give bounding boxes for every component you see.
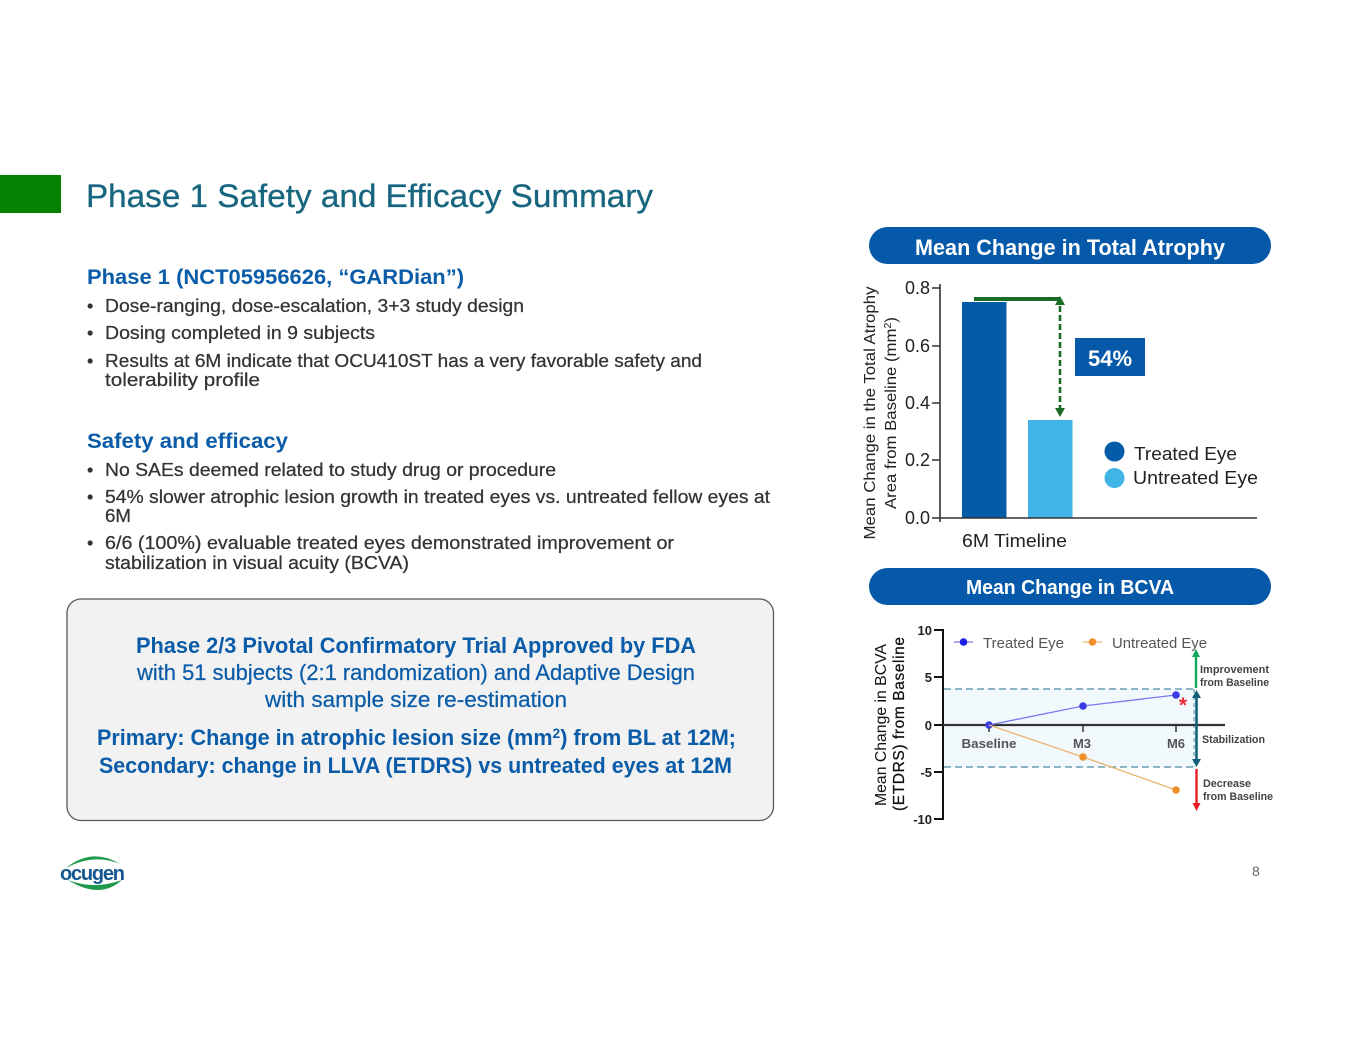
- text block: Safety and efficacy: [87, 430, 770, 573]
- text block: Safety and efficacy: 6M: [105, 505, 131, 526]
- y axis tick labels: 0.8: [905, 278, 930, 298]
- text block: Safety and efficacy: •: [87, 460, 93, 480]
- y axis tick labels: 0: [925, 718, 932, 733]
- bar: treated eye: [962, 302, 1006, 518]
- callout: Phase 2/3 trial: Primary: Change in atrophic lesion size (mm: [97, 725, 562, 750]
- text block: Safety and efficacy: No SAEs deemed related to study drug or procedure: [105, 459, 556, 480]
- text block: Safety and efficacy: 54% slower atrophic lesion growth in treated eyes vs. untreated fellow eyes at: [105, 486, 770, 507]
- text block: Phase 1 study: [87, 266, 702, 390]
- text block: Phase 1 study: •: [87, 296, 93, 316]
- callout: Phase 2/3 trial: Secondary: change in LLVA (ETDRS) vs untreated eyes at 12M: [99, 753, 732, 778]
- y axis title: 2: [883, 322, 894, 329]
- logo: ocugen: ocugen: [60, 863, 125, 885]
- y axis tick labels: 0.2: [905, 450, 930, 470]
- legend: Untreated Eye: [1112, 635, 1207, 652]
- title: Phase 1 Safety and Efficacy Summary: [86, 178, 653, 214]
- page number: 8: [1252, 863, 1260, 879]
- annotation labels: Stabilization: [1202, 734, 1265, 746]
- text block: Phase 1 study: Results at 6M indicate that OCU410ST has a very favorable safety and: [105, 350, 702, 371]
- annotation labels: [1200, 664, 1273, 803]
- title accent block: [0, 175, 61, 213]
- x axis labels: [962, 736, 1185, 751]
- axes: [932, 284, 1257, 522]
- text block: Safety and efficacy: stabilization in visual acuity (BCVA): [105, 552, 409, 573]
- y axis title: Area from Baseline (mm: [883, 342, 900, 509]
- legend: [954, 635, 1207, 652]
- callout: Phase 2/3 trial: Phase 2/3 Pivotal Confirmatory Trial Approved by FDA: [136, 633, 696, 658]
- annotation labels: from Baseline: [1200, 677, 1269, 689]
- series: untreated eye: [989, 725, 1180, 794]
- callout: 54%: 54%: [1088, 346, 1132, 371]
- annotation labels: Improvement: [1200, 664, 1269, 676]
- text block: Phase 1 study: Dosing completed in 9 subjects: [105, 322, 375, 343]
- series: treated eye: [985, 691, 1180, 729]
- callout: Phase 2/3 trial: with sample size re-estimation: [264, 687, 567, 712]
- callout: Phase 2/3 trial: 2: [553, 725, 560, 741]
- y axis tick labels: [913, 623, 932, 827]
- x axis labels: Baseline: [962, 736, 1016, 751]
- y axis title: Mean Change in the Total Atrophy: [862, 286, 879, 540]
- arrow: stabilization: [1192, 690, 1201, 767]
- y axis title: (ETDRS) from Baseline: [891, 637, 908, 811]
- y axis tick labels: 0.6: [905, 336, 930, 356]
- arrow: improvement: [1192, 649, 1200, 688]
- callout: Phase 2/3 trial: ) from BL at 12M;: [560, 725, 736, 750]
- text block: Phase 1 study: tolerability profile: [105, 369, 260, 390]
- annotation labels: from Baseline: [1203, 791, 1273, 803]
- y axis title: [862, 286, 900, 540]
- legend: Untreated Eye: [1133, 467, 1258, 488]
- logo: ocugen: [60, 856, 125, 890]
- y axis tick labels: -10: [913, 812, 932, 827]
- text block: Phase 1 study: Phase 1 (NCT05956626, “GARDian”): [87, 266, 464, 289]
- y axis title: [873, 637, 908, 811]
- text block: Safety and efficacy: •: [87, 487, 93, 507]
- callout: Phase 2/3 trial: [67, 599, 774, 820]
- legend: Treated Eye: [1134, 443, 1237, 464]
- significance asterisk: *: [1179, 694, 1188, 717]
- y axis tick labels: -5: [920, 765, 932, 780]
- y axis tick labels: 0.4: [905, 393, 930, 413]
- arrow: 54% reduction: [974, 296, 1065, 417]
- legend: [1104, 442, 1258, 488]
- y axis title: ): [883, 317, 900, 323]
- arrow: decrease: [1192, 769, 1200, 811]
- text block: Phase 1 study: Dose-ranging, dose-escalation, 3+3 study design: [105, 295, 524, 316]
- y axis tick labels: [905, 278, 930, 528]
- legend: Treated Eye: [983, 635, 1064, 652]
- y axis tick labels: 5: [925, 670, 932, 685]
- bar: untreated eye: [1028, 420, 1072, 518]
- text block: Safety and efficacy: 6/6 (100%) evaluable treated eyes demonstrated improvement or: [105, 532, 674, 553]
- heading: Mean Change in Total Atrophy: Mean Change in Total Atrophy: [915, 235, 1226, 260]
- text block: Safety and efficacy: •: [87, 533, 93, 553]
- annotation labels: Decrease: [1203, 778, 1251, 790]
- x axis labels: M3: [1073, 736, 1091, 751]
- callout: 54%: [1075, 338, 1145, 376]
- line chart: BCVA: [873, 623, 1273, 827]
- bar chart: total atrophy: [862, 278, 1258, 551]
- x axis labels: M6: [1167, 736, 1185, 751]
- text block: Safety and efficacy: Safety and efficacy: [87, 430, 288, 453]
- x axis label: 6M Timeline: [962, 530, 1067, 551]
- text block: Phase 1 study: •: [87, 323, 93, 343]
- stabilization band: [944, 689, 1195, 767]
- axes: [934, 629, 943, 820]
- text block: Phase 1 study: •: [87, 351, 93, 371]
- y axis tick labels: 10: [918, 623, 932, 638]
- heading: Mean Change in BCVA: Mean Change in BCVA: [966, 576, 1174, 599]
- y axis tick labels: 0.0: [905, 508, 930, 528]
- callout: Phase 2/3 trial: with 51 subjects (2:1 randomization) and Adaptive Design: [136, 660, 695, 685]
- heading: Mean Change in Total Atrophy: [869, 227, 1271, 264]
- heading: Mean Change in BCVA: [869, 568, 1271, 605]
- y axis title: Mean Change in BCVA: [873, 643, 890, 806]
